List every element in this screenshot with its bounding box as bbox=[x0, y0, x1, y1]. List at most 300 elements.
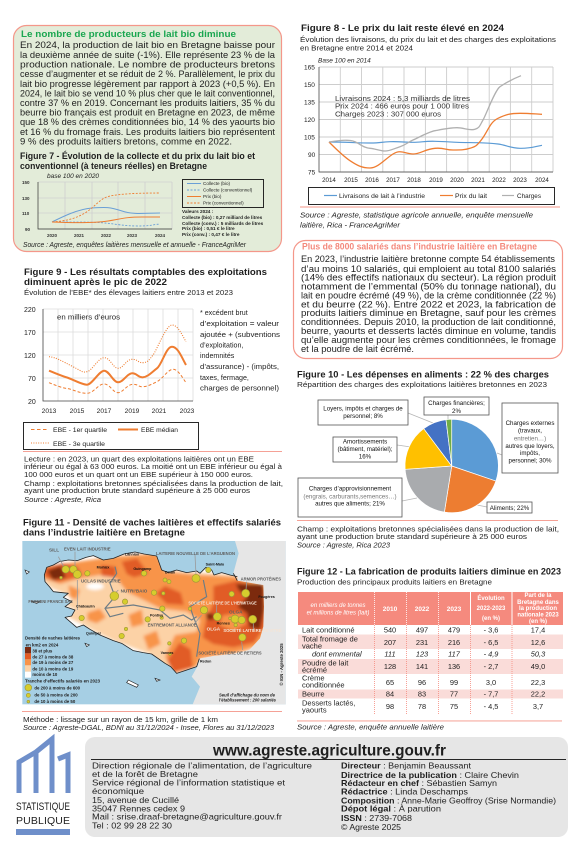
row values: - 7,7 bbox=[484, 690, 498, 698]
website url: www.agreste.agriculture.gouv.fr bbox=[212, 742, 446, 760]
figure 12 subtitle: Production des principaux produits laitiers en Bretagne bbox=[297, 578, 492, 586]
line chart: figure 8: 150 bbox=[304, 82, 315, 89]
row values: 83 bbox=[418, 690, 426, 698]
panel body text: notamment de l’emmental (50% du tonnage national), du bbox=[301, 282, 556, 292]
pie label: external charges: impôts, bbox=[520, 450, 540, 457]
figure 8 source: Source : Agreste, statistique agricole annuelle, enquête mensuelle bbox=[300, 210, 533, 220]
figure 10 subtitle: Répartition des charges des exploitations laitières bretonnes en 2023 bbox=[297, 380, 547, 389]
publication credits: Rédactrice : Linda Deschamps bbox=[341, 788, 468, 796]
figure 8 legend: Prix du lait bbox=[455, 193, 487, 200]
line chart: figure 7: 2021 bbox=[74, 233, 85, 238]
map threshold note: l’établissement : 200 salariés bbox=[219, 698, 277, 703]
figure 11 method and source: Méthode : lissage sur un rayon de 15 km, grille de 1 km bbox=[23, 715, 218, 724]
company labels: FROMENI FRANCE SAS bbox=[28, 599, 73, 604]
company labels bbox=[28, 547, 282, 656]
panel body text: produits laitiers diminue en Bretagne, sauf pour les crèmes bbox=[301, 308, 557, 318]
line chart: figure 9: 2019 bbox=[125, 408, 140, 415]
pie label: rents, taxes, staff bbox=[318, 400, 408, 425]
row values: 111 bbox=[384, 650, 396, 658]
figure 8: milk price bbox=[300, 23, 560, 230]
row values: 12,6 bbox=[531, 638, 545, 647]
pie label: depreciation: (bâtiment, matériel); bbox=[337, 446, 393, 453]
pie label: depreciation bbox=[333, 437, 397, 462]
panel: organic milk producers bbox=[14, 26, 282, 252]
pie label: external charges bbox=[502, 403, 558, 473]
table header: (en %) bbox=[482, 616, 500, 622]
table header: 2022-2023 bbox=[477, 606, 506, 612]
panel body text: (14% des effectifs nationaux du secteur). La région produit bbox=[301, 272, 557, 282]
figure 7 legend bbox=[182, 180, 264, 208]
panel body text: et du beurre (22 %). Entre 2022 et 2023, la fabrication de bbox=[301, 300, 556, 310]
figure 8 source bbox=[300, 210, 533, 230]
pie label: depreciation: Amortissements bbox=[343, 438, 387, 446]
map legend: cow density: 38 et plus bbox=[32, 648, 53, 653]
figure 7 legend: Collecte (conventionnel) bbox=[203, 188, 253, 192]
figure 8 subtitle: en Bretagne entre 2014 et 2024 bbox=[300, 44, 413, 52]
town labels: Dinan bbox=[165, 571, 175, 575]
panel body text: En 2024, la production de lait bio en Bretagne baisse pour bbox=[20, 40, 275, 50]
line chart: figure 8: 2022 bbox=[492, 177, 506, 184]
line chart: figure 7: base 100 en 2020 bbox=[47, 173, 99, 180]
map threshold note: Seuil d’affichage du nom de bbox=[219, 692, 276, 697]
town labels: Quimper bbox=[86, 631, 102, 635]
company labels: SOCIÉTÉ LAITIÈRE DE RETIERS bbox=[198, 649, 262, 656]
figure 9 note: ajoutée + (subventions bbox=[200, 331, 280, 339]
row values: 540 bbox=[384, 626, 396, 634]
address block: 15, avenue de Cucillé bbox=[92, 796, 179, 805]
figure 8 title: Figure 8 - Le prix du lait reste élevé en 2024 bbox=[301, 23, 505, 34]
publication credits bbox=[341, 762, 556, 832]
panel body text: qu’elle augmente pour les crèmes conditionnées, le fromage bbox=[301, 335, 556, 345]
panel body text: 9 % des produits laitiers bretons, comme en 2022. bbox=[20, 136, 232, 146]
figure 9 legend: EBE - 3e quartile bbox=[53, 441, 105, 448]
row values: - 2,7 bbox=[484, 662, 498, 671]
line chart: figure 8: 2016 bbox=[365, 177, 379, 184]
row values: 22,2 bbox=[531, 690, 545, 698]
map legend: cow density: de 27 à moins de 38 bbox=[32, 654, 74, 659]
address block: économique bbox=[92, 787, 145, 796]
table header bbox=[298, 592, 563, 625]
figure 10 scope and source: Source : Agreste, Rica 2023 bbox=[297, 540, 391, 550]
logo: Statistique publique: PUBLIQUE bbox=[16, 815, 70, 827]
pie label: depreciation: 16% bbox=[359, 454, 372, 460]
panel heading: Le nombre de producteurs de lait bio diminue bbox=[21, 29, 236, 40]
line chart: figure 9 bbox=[24, 307, 195, 415]
figure 9 legend bbox=[24, 422, 198, 450]
figure 9 note bbox=[200, 309, 280, 392]
figure 7 values bbox=[182, 209, 264, 237]
pie label: supplies: Charges d’approvisionnement bbox=[309, 486, 391, 492]
line chart: figure 8: 75 bbox=[308, 170, 316, 176]
row values: 207 bbox=[384, 638, 396, 647]
panel body text: beurre bio français est produit en Bretagne en 2023, de même bbox=[20, 108, 275, 118]
town labels: Fougères bbox=[258, 595, 275, 599]
line chart: figure 8: 135 bbox=[304, 100, 315, 106]
figure 9 reading note and source: 100 000 euros et un quart ont un EBE supérieur à 150 000 euros. bbox=[24, 470, 253, 479]
company labels: SILL bbox=[49, 548, 59, 553]
line chart: figure 7: 2022 bbox=[101, 233, 112, 238]
pie label: rents, taxes, staff: Loyers, impôts et charges de bbox=[323, 406, 403, 412]
line chart: figure 8: 2015 bbox=[344, 177, 358, 184]
publication credits: Directeur : Benjamin Beaussant bbox=[341, 762, 472, 770]
line chart: figure 9: 2013 bbox=[42, 408, 57, 415]
map legend: cow density: Densité de vaches laitières bbox=[25, 636, 81, 641]
panel body text bbox=[20, 40, 276, 146]
panel body text: et la poudre de lait écrémé. bbox=[301, 344, 414, 354]
pie label: external charges: entretien…) bbox=[514, 436, 546, 442]
pie label: external charges: (travaux, bbox=[518, 428, 542, 434]
panel body text: et 16 % du fromage frais. Les produits laitiers bio représentent bbox=[20, 127, 276, 137]
figure 10 scope and source bbox=[297, 524, 559, 550]
row values: 78 bbox=[418, 702, 426, 711]
figure 9 note: taxes, fermage, bbox=[200, 374, 249, 382]
address block: 35047 Rennes cedex 9 bbox=[92, 804, 185, 814]
pie label: supplies bbox=[298, 478, 402, 517]
row labels: yaourts bbox=[302, 706, 327, 714]
pie label: external charges: Charges externes bbox=[506, 420, 554, 427]
figure 9 title: Figure 9 - Les résultats comptables des exploitations bbox=[24, 267, 267, 278]
table header: et millions de litres (lait) bbox=[307, 610, 369, 616]
panel body text bbox=[301, 254, 557, 354]
figure 8 subtitle: Évolution des livraisons, du prix du lait et des charges des exploitations bbox=[300, 35, 556, 44]
panel body text: que 18 % des crèmes conditionnées bio, 14 % des yaourts bio bbox=[20, 117, 275, 127]
data table bbox=[298, 592, 563, 714]
map legend: employees: de 200 à moins de 600 bbox=[34, 686, 81, 691]
line chart: figure 8: 90 bbox=[308, 152, 316, 159]
address block bbox=[92, 762, 313, 830]
row labels: Beurre bbox=[302, 690, 325, 698]
pie label: financial charges: 2% bbox=[452, 408, 461, 415]
panel body text: production nationale. Le nombre de producteurs bretons bbox=[20, 60, 276, 70]
line chart: figure 9: 70 bbox=[28, 376, 36, 383]
table header: Bretagne dans bbox=[517, 600, 559, 606]
line chart: figure 8: 2024 bbox=[535, 177, 549, 184]
pie label: external charges: personnel; 30% bbox=[508, 458, 552, 464]
pie label: supplies: (engrais, carburants,semences…) bbox=[303, 494, 397, 500]
map legend: employees: Tranche d’effectifs salariés en 2023 bbox=[25, 678, 101, 683]
figure 7 title: conventionnel (à teneurs réelles) en Bretagne bbox=[20, 161, 207, 171]
row values: 3,0 bbox=[486, 678, 496, 687]
town labels: Vannes bbox=[161, 651, 173, 655]
figure 7 values: Prix (conv.) : 0,47 € le litre bbox=[182, 232, 240, 237]
figure 7 values: Collecte (conv.) : 5 milliards de litres bbox=[182, 221, 264, 226]
address block: Direction régionale de l’alimentation, de l’agriculture bbox=[92, 762, 313, 770]
town labels: Guingamp bbox=[133, 567, 152, 571]
row labels: Lait conditionné bbox=[302, 626, 355, 634]
row labels: Total fromage de bbox=[302, 634, 358, 644]
company labels: ARMOR PROTÉINES bbox=[241, 574, 281, 581]
row values: 3,7 bbox=[533, 702, 543, 711]
figure 10 scope and source: ayant une production brute standard supérieure à 25 000 euros bbox=[297, 532, 527, 541]
figure 9 title: diminuent après le pic de 2022 bbox=[24, 277, 167, 288]
table header: (en %) bbox=[529, 619, 547, 625]
line chart: figure 9: 2023 bbox=[180, 408, 195, 415]
figure 11 title bbox=[23, 518, 281, 538]
figure 9 note: * excédent brut bbox=[200, 309, 248, 317]
table header: la production bbox=[519, 606, 557, 612]
row values: 136 bbox=[448, 662, 460, 671]
company labels: SOCIÉTÉ LAITIÈRE DE L’HERMITAGE bbox=[188, 598, 257, 605]
figure 12 source: Source : Agreste, enquête annuelle laitière bbox=[297, 722, 444, 732]
town labels: Redon bbox=[200, 659, 211, 663]
figure 9 subtitle: Évolution de l’EBE* des élevages laitiers entre 2013 et 2023 bbox=[24, 288, 233, 297]
map legend: cow density: de 19 à moins de 27 bbox=[32, 660, 74, 665]
line chart: figure 8: 105 bbox=[304, 134, 315, 142]
figure 9 note: d’exploitation = valeur bbox=[200, 320, 280, 328]
line chart: figure 8: Base 100 en 2014 bbox=[318, 58, 371, 64]
figure 7 title bbox=[20, 151, 255, 171]
figure 7 legend: Prix (conventionnel) bbox=[203, 200, 244, 206]
publication credits: Composition : Anne-Marie Geoffroy (Srise Normandie) bbox=[341, 796, 556, 806]
panel body text: cesse d’augmenter et se réduit de 2 %. Parallèlement, le prix du bbox=[20, 69, 275, 79]
line chart: figure 7: 130 bbox=[22, 196, 30, 201]
figure 7 values: Valeurs 2024 : bbox=[182, 209, 214, 214]
row labels bbox=[302, 626, 362, 714]
line chart: figure 8: 2014 bbox=[322, 177, 336, 184]
line chart: figure 7: 2020 bbox=[47, 233, 58, 238]
pie label: rents, taxes, staff: personnel; 8% bbox=[343, 413, 383, 420]
figure 9 legend: EBE médian bbox=[141, 427, 178, 434]
town labels: Pontivy bbox=[150, 613, 164, 617]
figure 9 reading note and source: Source : Agreste, Rica bbox=[24, 495, 101, 504]
figure 7 legend: Prix (bio) bbox=[203, 194, 222, 199]
pie label: feed: Aliments; 22% bbox=[490, 505, 530, 512]
line chart: figure 8: 2020 bbox=[450, 177, 464, 184]
line chart: figure 9: 20 bbox=[28, 399, 36, 406]
table header: nationale 2023 bbox=[517, 612, 559, 618]
line chart: figure 9: 170 bbox=[24, 330, 36, 337]
figure 9 reading note and source: ayant une production brute standard supérieure à 25 000 euros bbox=[24, 486, 250, 495]
row values: 117 bbox=[448, 650, 461, 658]
company labels: SOCIÉTÉ LAITIÈRE DE VITRÉ bbox=[223, 626, 282, 633]
row labels: Crème bbox=[302, 674, 325, 682]
address block: Mail : srise.draaf-bretagne@agriculture.gouv.fr bbox=[92, 812, 282, 822]
row labels: Desserts lactés, bbox=[302, 698, 355, 708]
map of Brittany bbox=[22, 541, 286, 704]
logo: Statistique publique: STATISTIQUE bbox=[16, 801, 70, 813]
publication credits: Rédacteur en chef : Sébastien Samyn bbox=[341, 779, 497, 788]
line chart: figure 8: Charges 2023 : 307 000 euros bbox=[335, 110, 441, 118]
row labels: conditionnée bbox=[302, 680, 345, 690]
figure 8 legend bbox=[308, 188, 554, 204]
town labels: Rennes bbox=[217, 622, 230, 626]
figure 8 legend: Livraisons de lait à l’industrie bbox=[339, 193, 425, 200]
line chart: figure 8: 2019 bbox=[429, 177, 443, 184]
figure 12 title: Figure 12 - La fabrication de produits laitiers diminue en 2023 bbox=[297, 566, 561, 578]
line chart: figure 8: 2021 bbox=[471, 177, 485, 184]
company labels: EVEN LAIT INDUSTRIE bbox=[64, 547, 111, 552]
figure 9 reading note and source: inférieur ou égal à 63 000 euros. La moitié ont un EBE inférieur ou égal à bbox=[24, 462, 283, 471]
figure 9 note: charges de personnel) bbox=[200, 384, 279, 392]
figure 7 values: Collecte (bio) : 0,27 milliard de litres bbox=[182, 215, 263, 220]
line chart: figure 7: 2024 bbox=[155, 233, 166, 238]
figure 9: farm results bbox=[23, 267, 283, 504]
row values: 75 bbox=[450, 702, 458, 711]
line chart: figure 7: 90 bbox=[25, 227, 31, 232]
pie label: external charges: autres que loyers, bbox=[505, 443, 555, 450]
icon: buildings bbox=[19, 739, 68, 793]
line chart: figure 7: 150 bbox=[22, 180, 30, 185]
figure 7 values: Prix (bio) : 0,51 € le litre bbox=[182, 226, 235, 231]
panel heading: Plus de 8000 salariés dans l’industrie laitière en Bretagne bbox=[302, 242, 537, 252]
logo: Statistique publique bbox=[16, 739, 70, 835]
company labels: UCLAS INDUSTRIE bbox=[81, 578, 121, 583]
figure 10: feed expenses bbox=[297, 370, 559, 550]
panel body text: contre 37 % en 2019. Concernant les produits laitiers, 35 % du bbox=[20, 98, 275, 108]
line chart: figure 8 bbox=[304, 58, 553, 184]
row values: 128 bbox=[384, 662, 396, 671]
company labels: NUTRI’BAIO bbox=[121, 589, 148, 594]
panel body text: conditionnées. Depuis 2010, la production de lait conditionné, bbox=[301, 317, 556, 327]
row values: - 4,9 bbox=[484, 650, 498, 658]
map legend: employees: de 50 à moins de 200 bbox=[34, 693, 78, 698]
town labels: Morlaix bbox=[97, 565, 109, 569]
row values: 231 bbox=[416, 638, 428, 647]
company labels: OLGA bbox=[207, 627, 221, 632]
panel: dairy industry employees bbox=[294, 240, 562, 358]
row values: 84 bbox=[386, 690, 394, 698]
employment circles bbox=[60, 566, 257, 655]
line chart: figure 9: 2017 bbox=[97, 408, 112, 415]
row values: 123 bbox=[416, 650, 429, 658]
figure 9 note: d’assurance) - (impôts, bbox=[200, 363, 279, 371]
line chart: figure 9: 2021 bbox=[152, 408, 167, 415]
address block: et de la forêt de Bretagne bbox=[92, 770, 199, 779]
map legend: employees bbox=[25, 678, 101, 704]
table header: Évolution bbox=[477, 594, 505, 602]
line chart: figure 7: 2023 bbox=[127, 233, 138, 238]
line chart: figure 8: Prix 2024 : 466 euros pour 1 000 litres bbox=[335, 102, 469, 110]
panel body text: d’au moins 10 salariés, qui emploient au total 8100 salariés bbox=[301, 264, 557, 274]
row labels: Poudre de lait bbox=[302, 658, 349, 668]
line chart: figure 9: 2015 bbox=[70, 408, 85, 415]
figure 9 reading note and source: Lecture : en 2023, un quart des exploitations laitières ont un EBE bbox=[24, 454, 254, 464]
pie label: supplies: autres que aliments; 21% bbox=[315, 500, 385, 508]
footer panel bbox=[85, 737, 568, 837]
row values: 50,3 bbox=[531, 650, 546, 658]
row values bbox=[384, 626, 546, 711]
company labels: OLGA bbox=[229, 610, 243, 615]
line chart: figure 9: en milliers d’euros bbox=[57, 312, 120, 322]
pink row bands bbox=[298, 634, 563, 698]
map threshold note bbox=[219, 692, 277, 703]
table header: 2010 bbox=[383, 606, 398, 613]
row values: 479 bbox=[448, 626, 460, 634]
address block: Tel : 02 99 28 22 30 bbox=[92, 822, 172, 830]
map legend: cow density bbox=[25, 636, 81, 678]
figure 9 note: d’exploitation, bbox=[200, 342, 243, 350]
line chart: figure 8: 120 bbox=[304, 117, 315, 124]
table header: 2023 bbox=[447, 606, 462, 613]
map legend: cow density: en km2 en 2024 bbox=[26, 642, 59, 647]
row values: 497 bbox=[416, 626, 428, 634]
row values: 22,3 bbox=[531, 678, 545, 687]
company labels: LAITERIE NOUVELLE DE L’ARGUENON bbox=[156, 551, 236, 556]
figure 10 scope and source: Champ : exploitations bretonnes spécialisées dans la production de lait, bbox=[297, 524, 559, 534]
leader lines bbox=[397, 413, 502, 507]
map credit: © IGN - Agreste 2025 bbox=[279, 643, 284, 686]
row values: 99 bbox=[450, 678, 458, 687]
line chart: figure 9: 220 bbox=[24, 307, 36, 314]
panel body text: 2024, le lait bio se vend 10 % plus cher que le lait conventionnel, bbox=[20, 88, 275, 98]
table header: en milliers de tonnes bbox=[310, 603, 366, 609]
town labels bbox=[76, 553, 275, 663]
figure 9 legend: EBE - 1er quartile bbox=[53, 427, 107, 434]
table header: Part de la bbox=[524, 593, 552, 599]
publication credits: ISSN : 2739-7068 bbox=[341, 814, 412, 823]
publication credits: Directrice de la publication : Claire Chevin bbox=[341, 771, 519, 780]
row values: 216 bbox=[448, 638, 460, 647]
figure 11 title: Figure 11 - Densité de vaches laitières et effectifs salariés bbox=[23, 518, 281, 528]
figure 9 reading note and source bbox=[24, 454, 283, 504]
row labels: dont emmental bbox=[312, 650, 362, 658]
figure 10 title: Figure 10 - Les dépenses en aliments : 22 % des charges bbox=[297, 370, 549, 380]
line chart: figure 7 bbox=[22, 173, 172, 238]
map legend: cow density: moins de 10 bbox=[32, 672, 58, 677]
row values: - 6,5 bbox=[484, 638, 498, 647]
town labels: Saint-Malo bbox=[206, 563, 225, 567]
row values: 49,0 bbox=[531, 662, 545, 671]
figure 11 method and source bbox=[23, 715, 275, 732]
figure 7 legend: Collecte (bio) bbox=[203, 181, 231, 186]
company labels: ENTREMONT ALLIANCE bbox=[148, 622, 197, 627]
panel body text: beurre, yaourts et desserts lactés diminue en volume, tandis bbox=[301, 326, 557, 336]
map legend: cow density: de 10 à moins de 19 bbox=[32, 666, 74, 671]
town labels: Lannion bbox=[125, 553, 139, 557]
row labels: écrémé bbox=[302, 666, 327, 674]
publication credits: Dépot légal : À parution bbox=[341, 804, 441, 814]
panel body text: lait en poudre écrémé (49 %), de la crème conditionnée (22 %) bbox=[301, 290, 556, 300]
row values: 141 bbox=[416, 662, 428, 671]
row values: - 3,6 bbox=[484, 626, 498, 634]
line chart: figure 9: 120 bbox=[24, 353, 36, 360]
map legend: employees: de 10 à moins de 50 bbox=[34, 699, 76, 704]
row labels: vache bbox=[302, 642, 322, 650]
row values: 77 bbox=[450, 690, 458, 698]
line chart: figure 8: 2023 bbox=[513, 177, 527, 184]
row values: 96 bbox=[418, 678, 426, 687]
figure 11: density map bbox=[22, 518, 286, 732]
panel body text: En 2023, l’industrie laitière bretonne compte 54 établissements bbox=[301, 254, 555, 264]
figure 8 subtitle bbox=[300, 35, 556, 52]
figure 7 title: Figure 7 - Évolution de la collecte et du prix du lait bio et bbox=[20, 151, 255, 161]
line chart: figure 8: 165 bbox=[304, 64, 315, 72]
figure 11 method and source: Source : Agreste-DGAL, BDNI au 31/12/2024 - Insee, Flores au 31/12/2023 bbox=[23, 723, 275, 732]
figure 8 legend: Charges bbox=[517, 193, 541, 200]
line chart: figure 8: 2017 bbox=[386, 177, 400, 184]
panel body text: la deuxième année de suite (-1%). Elle représente 23 % de la bbox=[20, 50, 275, 60]
figure 8 source: laitière, Rica - FranceAgriMer bbox=[300, 220, 401, 230]
town labels: Châteaulin bbox=[76, 604, 95, 608]
figure 7 source: Source : Agreste, enquêtes laitières mensuelle et annuelle - FranceAgriMer bbox=[23, 240, 246, 249]
publication credits: © Agreste 2025 bbox=[341, 823, 401, 832]
figure 9 title bbox=[24, 267, 267, 288]
row values: 98 bbox=[386, 702, 394, 711]
panel body text: lait bio progresse légèrement par rapport à 2023 (+0,5 %). En bbox=[20, 79, 275, 89]
figure 11 title: dans l’industrie laitière en Bretagne bbox=[23, 528, 185, 538]
pie label: financial charges: Charges financières; bbox=[428, 400, 485, 407]
address block: Service régional de l’information statistique et bbox=[92, 778, 286, 788]
pie label: feed bbox=[487, 502, 532, 513]
line chart: figure 8: Livraisons 2024 : 5,3 milliards de litres bbox=[335, 94, 470, 103]
figure 9 note: indemnités bbox=[200, 352, 235, 360]
figure 9 reading note and source: Champ : exploitations bretonnes spécialisées dans la production de lait, bbox=[24, 479, 283, 488]
row values: - 4,5 bbox=[484, 702, 498, 711]
line chart: figure 8: 2018 bbox=[407, 177, 421, 184]
row values: 65 bbox=[386, 678, 394, 687]
row values: 17,4 bbox=[531, 626, 545, 634]
pie chart bbox=[405, 419, 498, 513]
